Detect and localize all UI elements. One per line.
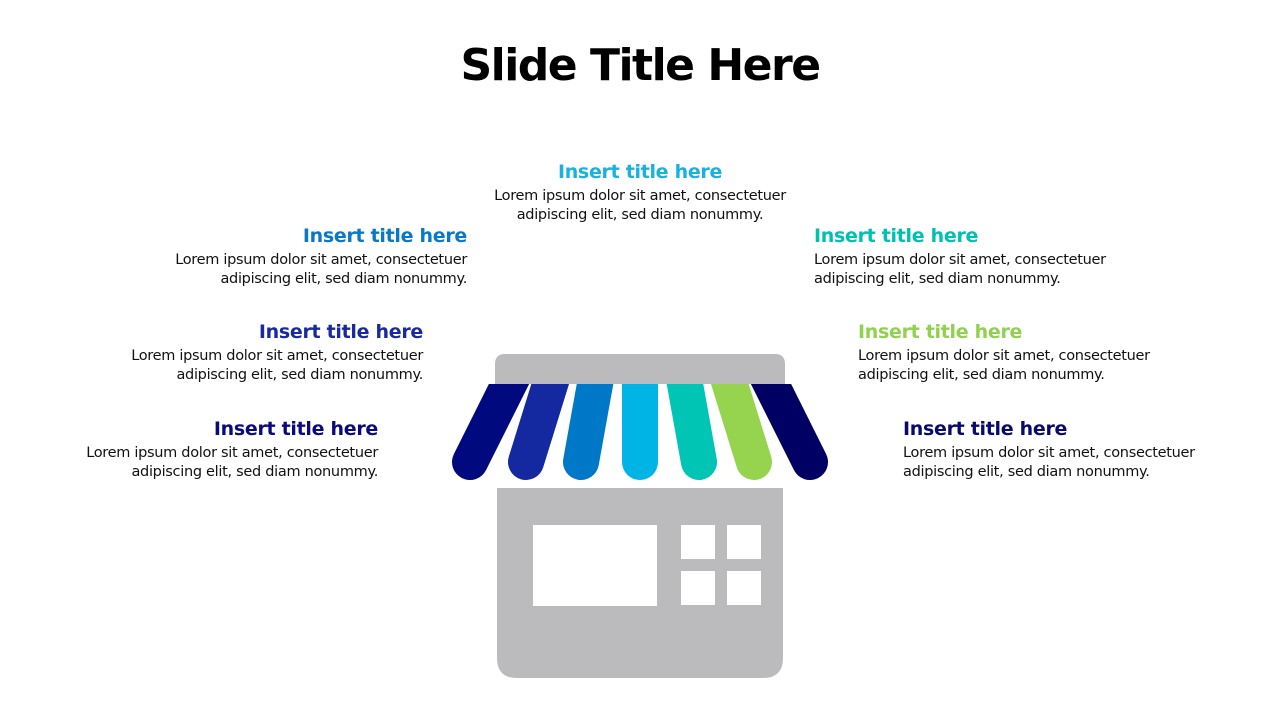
text block: left 3: adipiscing elit, sed diam nonummy. — [131, 464, 378, 480]
text block: right 3 — [903, 418, 1196, 480]
text block: left 3: Insert title here — [214, 418, 378, 440]
text block: right 2: adipiscing elit, sed diam nonummy. — [858, 367, 1105, 383]
text block: left 1: adipiscing elit, sed diam nonummy. — [220, 271, 467, 287]
text block: right 1: adipiscing elit, sed diam nonummy. — [814, 271, 1061, 287]
awning bar — [495, 354, 785, 384]
text block: left 2: Lorem ipsum dolor sit amet, consectetuer — [131, 348, 423, 364]
awning stripes — [470, 362, 810, 462]
title: Slide Title Here — [460, 40, 820, 91]
text block: right 3: adipiscing elit, sed diam nonummy. — [903, 464, 1150, 480]
text block: right 2: Lorem ipsum dolor sit amet, consectetuer — [858, 348, 1150, 364]
text block: top: Lorem ipsum dolor sit amet, consectetuer — [494, 188, 786, 204]
text block: right 3: Insert title here — [903, 418, 1067, 440]
text block: left 3 — [86, 418, 378, 480]
text block: right 1: Lorem ipsum dolor sit amet, consectetuer — [814, 252, 1106, 268]
text block: top: adipiscing elit, sed diam nonummy. — [517, 207, 763, 223]
icon: shop — [452, 354, 828, 678]
text block: left 3: Lorem ipsum dolor sit amet, consectetuer — [86, 445, 378, 461]
text block: right 3: Lorem ipsum dolor sit amet, consectetuer — [903, 445, 1195, 461]
text block: left 2: adipiscing elit, sed diam nonummy. — [176, 367, 423, 383]
text block: right 1: Insert title here — [814, 225, 978, 247]
text block: top — [494, 161, 786, 223]
text block: right 1 — [814, 225, 1106, 287]
text block: left 1 — [175, 225, 468, 287]
text block: left 2: Insert title here — [259, 321, 423, 343]
text block: left 1: Lorem ipsum dolor sit amet, consectetuer — [175, 252, 467, 268]
text block: right 2 — [858, 321, 1150, 383]
text block: top: Insert title here — [558, 161, 722, 183]
text block: right 2: Insert title here — [858, 321, 1022, 343]
building — [497, 488, 783, 678]
text block: left 2 — [131, 321, 424, 383]
text block: left 1: Insert title here — [303, 225, 467, 247]
